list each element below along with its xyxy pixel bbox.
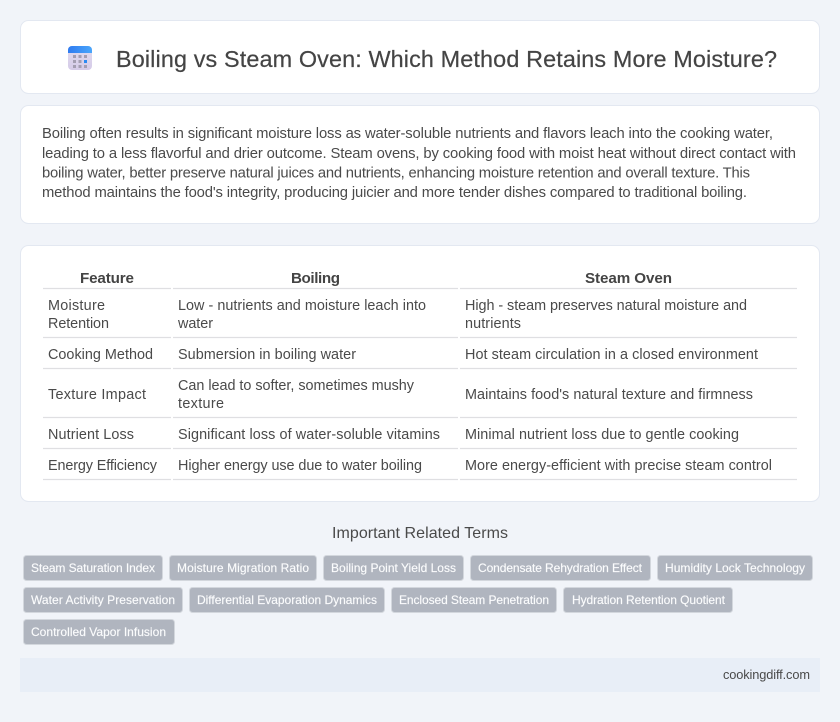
- row: texture impact: Maintains food's natural texture and firmness: [465, 387, 753, 403]
- row: cooking method: Submersion in boiling water: [178, 347, 356, 363]
- tag: Steam Saturation Index: [31, 561, 155, 575]
- panel: intro paragraph: boiling water, better preserve natural juices and nutrients, enhancing moisture retention and overall texture. This: [42, 166, 750, 182]
- row: moisture retention: Low - nutrients and moisture leach into: [178, 298, 426, 314]
- icon: calendar grid: [68, 46, 92, 70]
- table header row: Boiling: [291, 270, 340, 287]
- panel: intro paragraph: [20, 106, 820, 224]
- tag: Differential Evaporation Dynamics: [197, 593, 377, 607]
- row: texture impact: [48, 378, 753, 412]
- row: cooking method: Cooking Method: [48, 347, 153, 363]
- row: moisture retention: nutrients: [465, 316, 521, 332]
- tag list: [24, 556, 812, 644]
- panel: intro paragraph: method maintains the food's integrity, producing juicier and more tender dishes compared to traditional boiling.: [42, 185, 747, 201]
- panel: title header: [20, 20, 820, 94]
- tag: [564, 588, 732, 612]
- row: moisture retention: High - steam preserves natural moisture and: [465, 298, 747, 314]
- tag: [190, 588, 384, 612]
- tag: [470, 556, 650, 580]
- footer bar: cookingdiff.com: [723, 667, 810, 682]
- row: moisture retention: Retention: [48, 316, 109, 332]
- tag: Water Activity Preservation: [31, 593, 175, 607]
- tag: Moisture Migration Ratio: [177, 561, 309, 575]
- tag: [24, 588, 182, 612]
- row: nutrient loss: Nutrient Loss: [48, 427, 134, 443]
- row: nutrient loss: Significant loss of water-soluble vitamins: [178, 427, 440, 443]
- table header row: Feature: [80, 270, 134, 287]
- table header row: Steam Oven: [585, 270, 672, 287]
- tag: [24, 556, 162, 580]
- tag: [324, 556, 464, 580]
- row: texture impact: Can lead to softer, sometimes mushy: [178, 378, 415, 394]
- row: texture impact: texture: [178, 396, 224, 412]
- row: cooking method: Hot steam circulation in a closed environment: [465, 347, 758, 363]
- tag: [392, 588, 556, 612]
- row: energy efficiency: Energy Efficiency: [48, 458, 158, 474]
- tag: [170, 556, 316, 580]
- row: nutrient loss: [48, 427, 739, 443]
- row: moisture retention: water: [177, 316, 213, 332]
- tag: Enclosed Steam Penetration: [399, 593, 549, 607]
- heading: important related terms: Important Related Terms: [332, 525, 508, 542]
- tag: [658, 556, 812, 580]
- panel: intro paragraph: Boiling often results in significant moisture loss as water-soluble nutrients and flavors leach into the cooking water,: [42, 126, 773, 142]
- row: texture impact: Texture Impact: [48, 387, 146, 403]
- table header row: [80, 270, 672, 287]
- row: moisture retention: [48, 298, 747, 332]
- tag: [24, 620, 174, 644]
- tag: Humidity Lock Technology: [665, 561, 805, 575]
- title: Boiling vs Steam Oven: Which Method Retains More Moisture?: [116, 46, 777, 72]
- row: nutrient loss: Minimal nutrient loss due to gentle cooking: [465, 427, 739, 443]
- tag: Hydration Retention Quotient: [572, 593, 726, 607]
- tag: Condensate Rehydration Effect: [478, 561, 643, 575]
- row: cooking method: [48, 347, 758, 363]
- row: energy efficiency: Higher energy use due to water boiling: [178, 458, 422, 474]
- tag: Boiling Point Yield Loss: [331, 561, 456, 575]
- row: moisture retention: Moisture: [48, 298, 105, 314]
- tag: Controlled Vapor Infusion: [31, 625, 166, 639]
- panel: comparison table: [20, 246, 820, 502]
- row: energy efficiency: [48, 458, 772, 474]
- panel: intro paragraph: leading to a less flavorful and drier outcome. Steam ovens, by cooking food with moist heat without direct contact with: [42, 146, 796, 162]
- footer bar: [20, 658, 820, 692]
- row: energy efficiency: More energy-efficient with precise steam control: [465, 458, 772, 474]
